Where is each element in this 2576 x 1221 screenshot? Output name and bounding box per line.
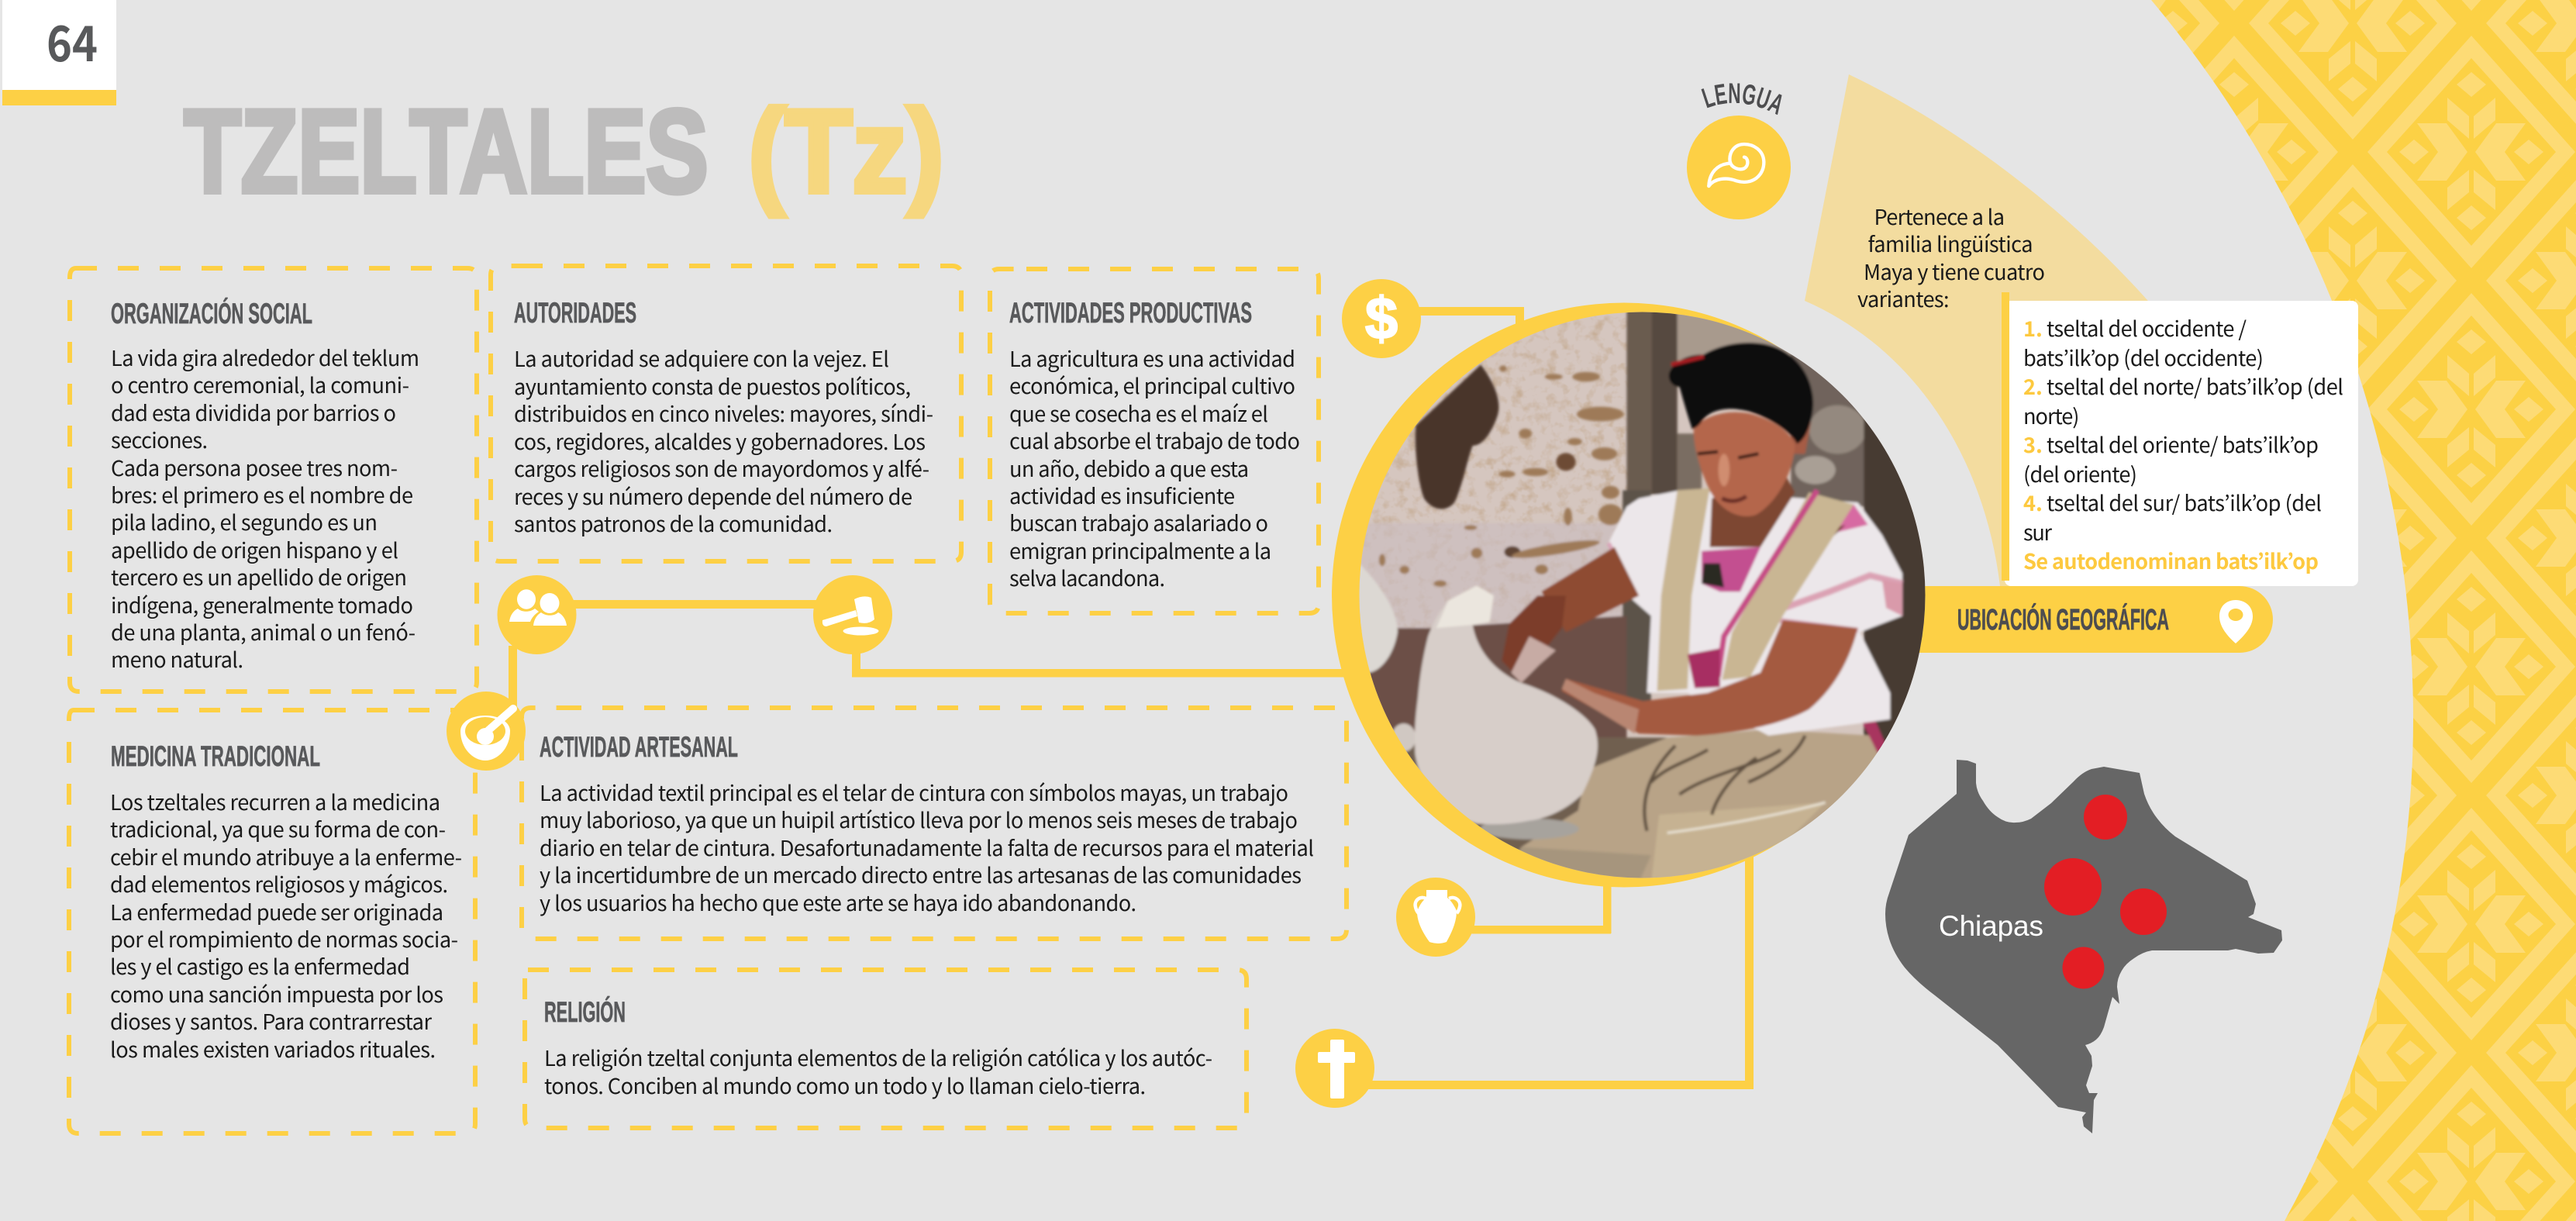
panel: actividades productivas: un año, debido a que esta: [1009, 452, 1249, 483]
ubicación geográfica pill: UBICACIÓN GEOGRÁFICA: [1957, 602, 2169, 636]
panel: medicina tradicional: tradicional, ya que su forma de con-: [110, 812, 446, 843]
panel: medicina tradicional: La enfermedad puede ser originada: [110, 895, 443, 926]
panel: actividades productivas: que se cosecha es el maíz el: [1009, 397, 1268, 428]
panel: autoridades: santos patronos de la comunidad.: [514, 507, 833, 538]
panel: religión: [525, 970, 1247, 1128]
panel: organización social: [70, 268, 477, 692]
panel: autoridades: ayuntamiento consta de puestos políticos,: [514, 370, 911, 401]
icon: cross: [1295, 1029, 1374, 1108]
panel: religión: La religión tzeltal conjunta elementos de la religión católica y los autóc-: [544, 1041, 1212, 1072]
panel: actividades productivas: cual absorbe el trabajo de todo: [1009, 424, 1300, 455]
panel: organización social: Cada persona posee tres nom-: [111, 451, 398, 482]
connector lines: [509, 307, 1754, 1089]
panel: medicina tradicional: [69, 710, 475, 1133]
icon: mortar and pestle: [447, 692, 526, 771]
page number tab: [2, 0, 116, 105]
panel: medicina tradicional: los males existen variados rituales.: [110, 1033, 436, 1064]
icon: dollar: [1342, 279, 1421, 358]
panel: autoridades: distribuidos en cinco niveles: mayores, síndi-: [514, 397, 933, 428]
panel: organización social: de una planta, animal o un fenó-: [111, 616, 416, 647]
language variants list: 3.: [2023, 428, 2043, 459]
icon: people: [498, 575, 577, 654]
language variants list: tseltal del norte/ bats’ilk’op (del: [2047, 370, 2343, 401]
panel: actividades productivas: La agricultura es una actividad: [1009, 342, 1295, 373]
map: Chiapas: Chiapas: [1939, 910, 2043, 942]
icon: dollar: $: [1365, 286, 1398, 352]
language variants list: 2.: [2023, 370, 2043, 401]
page number tab: 64: [47, 5, 98, 76]
lengua intro text: familia lingüística: [1868, 227, 2033, 258]
panel: autoridades: AUTORIDADES: [514, 296, 636, 329]
panel: medicina tradicional: cebir el mundo atribuye a la enferme-: [110, 840, 462, 871]
panel: actividades productivas: emigran principalmente a la: [1009, 534, 1271, 565]
language variants list: (del oriente): [2023, 457, 2137, 488]
ubicación geográfica pill: [1860, 586, 2273, 653]
language variants list: 4.: [2023, 486, 2043, 517]
panel: actividades productivas: [990, 269, 1319, 613]
language variants list: [2002, 292, 2358, 586]
title: TZELTALES: [184, 85, 709, 217]
panel: autoridades: reces y su número depende del número de: [514, 480, 912, 511]
lengua intro text: [1857, 200, 2045, 313]
panel: religión: tonos. Conciben al mundo como un todo y lo llaman cielo-tierra.: [544, 1069, 1146, 1100]
panel: medicina tradicional: Los tzeltales recurren a la medicina: [110, 785, 440, 816]
panel: organización social: tercero es un apellido de origen: [111, 560, 407, 592]
language variants list: bats’ilk’op (del occidente): [2023, 341, 2264, 372]
panel: actividad artesanal: y los usuarios ha hecho que este arte se haya ido abandonando.: [540, 886, 1136, 917]
panel: organización social: indígena, generalmente tomado: [111, 588, 413, 619]
panel: medicina tradicional: dad elementos religiosos y mágicos.: [110, 867, 448, 899]
panel: medicina tradicional: MEDICINA TRADICIONAL: [111, 740, 320, 772]
lengua intro text: variantes:: [1857, 282, 1950, 313]
panel: organización social: meno natural.: [111, 643, 243, 674]
panel: religión: RELIGIÓN: [544, 995, 626, 1028]
language variants list: Se autodenominan bats’ilk’op: [2023, 544, 2319, 575]
panel: actividades productivas: económica, el principal cultivo: [1009, 369, 1295, 400]
language variants list: tseltal del occidente /: [2047, 312, 2247, 343]
photo: woman shaping clay vessel: [1332, 295, 1938, 908]
lengua intro text: Pertenece a la: [1874, 200, 2005, 231]
panel: autoridades: [491, 266, 961, 561]
panel: actividades productivas: actividad es insuficiente: [1009, 479, 1235, 510]
panel: organización social: secciones.: [111, 423, 208, 454]
panel: organización social: dad esta dividida por barrios o: [111, 396, 396, 427]
panel: autoridades: La autoridad se adquiere con la vejez. El: [514, 342, 889, 373]
lengua heading: [1701, 83, 1781, 152]
language variants list: tseltal del sur/ bats’ilk’op (del: [2047, 486, 2322, 517]
panel: actividad artesanal: diario en telar de cintura. Desafortunadamente la falta de recursos para el material: [540, 831, 1314, 862]
panel: medicina tradicional: dioses y santos. Para contrarrestar: [110, 1005, 432, 1036]
language variants list: tseltal del oriente/ bats’ilk’op: [2047, 428, 2319, 459]
lengua intro text: Maya y tiene cuatro: [1864, 255, 2045, 286]
language variants list: sur: [2023, 516, 2052, 547]
panel: organización social: bres: el primero es el nombre de: [111, 478, 413, 509]
panel: organización social: pila ladino, el segundo es un: [111, 505, 378, 536]
woven yellow pattern band: [2151, 0, 2576, 1221]
panel: organización social: o centro ceremonial, la comuni-: [111, 368, 409, 399]
panel: actividades productivas: selva lacandona.: [1009, 561, 1165, 592]
panel: autoridades: cargos religiosos son de mayordomos y alfé-: [514, 452, 929, 483]
panel: actividades productivas: ACTIVIDADES PRODUCTIVAS: [1009, 296, 1252, 329]
lengua heading: LENGUA: [1701, 83, 1781, 115]
map: Chiapas: [1885, 760, 2282, 1133]
icon: jar: [1396, 878, 1475, 957]
panel: medicina tradicional: les y el castigo es la enfermedad: [110, 950, 410, 981]
panel: actividad artesanal: y la incertidumbre de un mercado directo entre las artesanas de las comunidades: [540, 858, 1302, 889]
panel: medicina tradicional: como una sanción impuesta por los: [110, 978, 443, 1009]
icon: gavel: [813, 575, 892, 654]
panel: actividad artesanal: ACTIVIDAD ARTESANAL: [540, 730, 738, 763]
panel: autoridades: cos, regidores, alcaldes y gobernadores. Los: [514, 425, 926, 456]
language variants list: 1.: [2023, 312, 2043, 343]
panel: organización social: La vida gira alrededor del teklum: [111, 341, 419, 372]
panel: actividad artesanal: [522, 708, 1347, 939]
title: (Tz): [749, 85, 944, 217]
panel: actividad artesanal: muy laborioso, ya que un huipil artístico lleva por lo menos seis meses de trabajo: [540, 803, 1298, 834]
icon: language swirl: [1687, 116, 1791, 219]
panel: organización social: apellido de origen hispano y el: [111, 533, 398, 564]
panel: organización social: ORGANIZACIÓN SOCIAL: [111, 297, 312, 329]
language variants list: norte): [2023, 399, 2079, 430]
panel: actividad artesanal: La actividad textil principal es el telar de cintura con símbolos mayas, un trabajo: [540, 776, 1288, 807]
panel: medicina tradicional: por el rompimiento de normas socia-: [110, 923, 458, 954]
panel: actividades productivas: buscan trabajo asalariado o: [1009, 506, 1268, 537]
lengua fan: [1805, 74, 2171, 589]
